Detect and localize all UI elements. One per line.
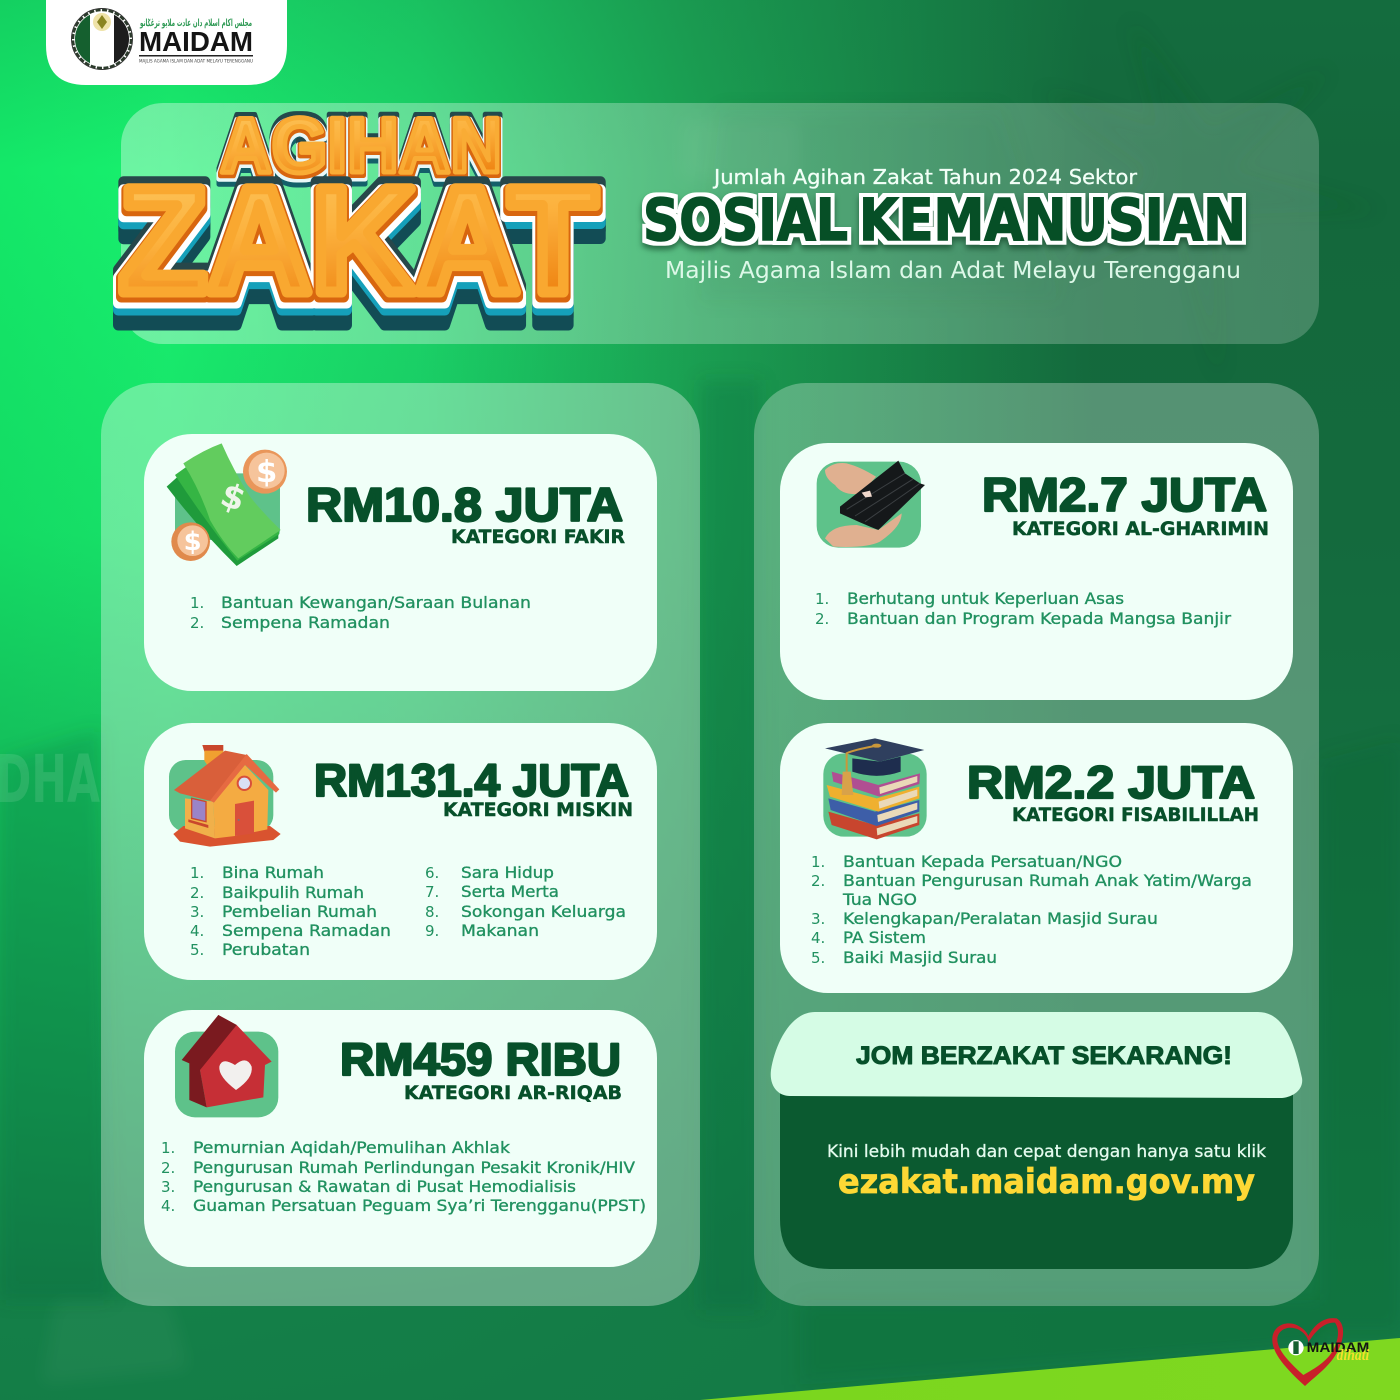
card: ar-riqab bbox=[144, 1010, 657, 1267]
footer logo: maidam dihati bbox=[1272, 1318, 1370, 1386]
list: 6. bbox=[425, 864, 439, 882]
list: Pengurusan Rumah Perlindungan Pesakit Kronik/HIV bbox=[193, 1158, 635, 1177]
list bbox=[815, 589, 1231, 628]
list: Bantuan Kewangan/Saraan Bulanan bbox=[221, 593, 531, 612]
list bbox=[190, 593, 531, 632]
category: KATEGORI AR-RIQAB bbox=[404, 1082, 622, 1104]
list bbox=[811, 852, 1252, 967]
amount: RM2.7 JUTA bbox=[982, 468, 1267, 521]
list: 2. bbox=[815, 610, 829, 628]
list: 3. bbox=[811, 910, 825, 928]
icon: books and cap bbox=[823, 738, 927, 839]
category: KATEGORI FISABILILLAH bbox=[1012, 804, 1259, 826]
footer logo: maidam dihati: dihati bbox=[1337, 1347, 1370, 1364]
heading: sosial kemanusian: KEMANUSIAN bbox=[859, 186, 1246, 254]
amount: RM131.4 JUTA bbox=[314, 755, 629, 806]
list: Pemurnian Aqidah/Pemulihan Akhlak bbox=[193, 1138, 511, 1157]
heading: sosial kemanusian bbox=[643, 186, 1246, 254]
amount: RM2.2 JUTA bbox=[967, 757, 1255, 808]
title: zakat: ZAKAT bbox=[119, 156, 597, 324]
list: 2. bbox=[811, 872, 825, 890]
list: 1. bbox=[811, 853, 825, 871]
category: KATEGORI FAKIR bbox=[451, 526, 625, 548]
list: 1. bbox=[815, 590, 829, 608]
list: 8. bbox=[425, 903, 439, 921]
list: 3. bbox=[190, 903, 204, 921]
card: fisabilillah bbox=[780, 723, 1293, 993]
list: Pembelian Rumah bbox=[222, 902, 377, 921]
list: 7. bbox=[425, 883, 439, 901]
list: Perubatan bbox=[222, 940, 310, 959]
background: DHA bbox=[0, 741, 100, 818]
amount: RM459 RIBU bbox=[340, 1034, 621, 1085]
title: agihan: AGIHAN bbox=[220, 101, 502, 189]
list: 4. bbox=[811, 929, 825, 947]
list bbox=[161, 1138, 646, 1215]
list: Makanan bbox=[461, 921, 539, 940]
card: fakir bbox=[144, 434, 657, 691]
list: Serta Merta bbox=[461, 882, 559, 901]
icon: money: $ bbox=[184, 527, 202, 557]
amount: RM10.8 JUTA bbox=[306, 478, 623, 531]
panel: right column bbox=[754, 383, 1319, 1306]
heading: sosial kemanusian: SOSIAL bbox=[643, 186, 848, 254]
logo arabic line: مجلس اكام اسلام دان عادت ملايو ترڠݢانو bbox=[139, 18, 252, 29]
cta header band bbox=[771, 1012, 1302, 1098]
list: Bina Rumah bbox=[222, 863, 324, 882]
list: 5. bbox=[190, 941, 204, 959]
panel: header bbox=[119, 101, 1319, 344]
list: Berhutang untuk Keperluan Asas bbox=[847, 589, 1124, 608]
list: 4. bbox=[161, 1197, 175, 1215]
icon: empty wallet bbox=[817, 461, 925, 548]
card: miskin bbox=[144, 723, 657, 980]
list: 9. bbox=[425, 922, 439, 940]
list: 5. bbox=[811, 949, 825, 967]
list: 2. bbox=[161, 1159, 175, 1177]
cta heading: JOM BERZAKAT SEKARANG! bbox=[856, 1042, 1232, 1070]
header subtitle: Majlis Agama Islam dan Adat Melayu Terengganu bbox=[665, 258, 1241, 284]
list: 3. bbox=[161, 1178, 175, 1196]
list: Bantuan Pengurusan Rumah Anak Yatim/Warga bbox=[843, 871, 1252, 890]
list: Sara Hidup bbox=[461, 863, 554, 882]
icon: money: $ bbox=[256, 455, 277, 490]
list: Bantuan dan Program Kepada Mangsa Banjir bbox=[847, 609, 1231, 628]
header kicker: Jumlah Agihan Zakat Tahun 2024 Sektor bbox=[712, 165, 1138, 189]
list: Bantuan Kepada Persatuan/NGO bbox=[843, 852, 1122, 871]
panel: left column bbox=[101, 383, 700, 1306]
list: Sempena Ramadan bbox=[221, 613, 390, 632]
list: 2. bbox=[190, 614, 204, 632]
category: KATEGORI AL-GHARIMIN bbox=[1012, 518, 1269, 540]
icon: house with heart bbox=[175, 1015, 278, 1117]
list: 1. bbox=[190, 594, 204, 612]
call to action card bbox=[771, 1012, 1302, 1269]
list: Tua NGO bbox=[842, 890, 917, 909]
list: Sempena Ramadan bbox=[222, 921, 391, 940]
icon: money: $ bbox=[216, 475, 251, 519]
list: 2. bbox=[190, 884, 204, 902]
logo tagline: MAJLIS AGAMA ISLAM DAN ADAT MELAYU TERENGGANU bbox=[139, 58, 253, 64]
logo emblem bbox=[71, 8, 133, 70]
icon: money bbox=[167, 443, 287, 566]
footer logo: maidam dihati: MAIDAM bbox=[1307, 1339, 1369, 1355]
logo tab bbox=[46, 0, 287, 85]
list: Guaman Persatuan Peguam Sya’ri Terengganu(PPST) bbox=[193, 1196, 646, 1215]
list bbox=[190, 863, 626, 959]
category: KATEGORI MISKIN bbox=[443, 799, 633, 821]
list: Pengurusan & Rawatan di Pusat Hemodialisis bbox=[193, 1177, 576, 1196]
list: 4. bbox=[190, 922, 204, 940]
list: Baiki Masjid Surau bbox=[843, 948, 997, 967]
cta url: ezakat.maidam.gov.my bbox=[838, 1162, 1255, 1202]
list: PA Sistem bbox=[843, 928, 926, 947]
card: al-gharimin bbox=[780, 443, 1293, 700]
logo wordmark: MAIDAM bbox=[139, 26, 253, 57]
list: Sokongan Keluarga bbox=[461, 902, 626, 921]
list: 1. bbox=[161, 1139, 175, 1157]
cta text: Kini lebih mudah dan cepat dengan hanya satu klik bbox=[827, 1142, 1266, 1162]
list: Baikpulih Rumah bbox=[222, 883, 364, 902]
list: Kelengkapan/Peralatan Masjid Surau bbox=[843, 909, 1158, 928]
ground lime strip bbox=[700, 1338, 1400, 1400]
icon: house bbox=[169, 745, 281, 847]
list: 1. bbox=[190, 864, 204, 882]
